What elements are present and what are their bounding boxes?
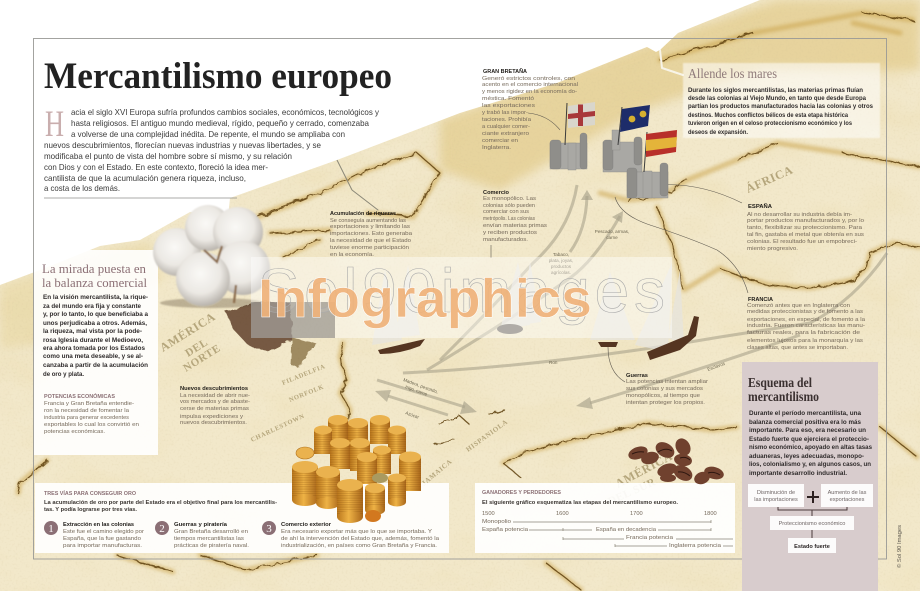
plus sign — [807, 491, 819, 503]
callout: guerras: Las potencias intentan ampliar — [626, 379, 708, 385]
potencias económicas: industria para generar excedentes — [44, 415, 129, 421]
callout: españa: colonias. El resultado fue un empobreci- — [747, 239, 857, 245]
panel body: Durante los siglos mercantilistas, las materias primas fluían — [688, 87, 863, 94]
intro text: cantilista de que la acumulación genera riqueza, incluso, — [44, 174, 246, 183]
callout: francia: exportaciones, en especial, de fomento a la — [747, 317, 866, 323]
callout: nuevos descubrimientos: La necesidad de abrir nue- — [180, 393, 250, 399]
intro text: a costa de los demás. — [44, 184, 120, 193]
trade goods labels: Madera, pescado, — [403, 377, 439, 395]
callout: acumulación de riquezas: Acumulación de riquezas — [330, 211, 396, 217]
panel body: era ahora tomada por los Estados — [43, 345, 145, 352]
intro text: modificaba el punto de vista del hombre sobre sí mismo, y su relación — [44, 152, 292, 161]
drop cap: H — [45, 104, 64, 145]
callout: nuevos descubrimientos: Nuevos descubrimientos — [180, 386, 248, 392]
map place names — [157, 163, 795, 508]
panel heading: GANADORES Y PERDEDORES — [482, 490, 561, 496]
fort: españa — [627, 130, 677, 198]
panel body: Estado fuerte que ejerciera el proteccio- — [749, 436, 869, 443]
callout: comercio: envían materias primas — [483, 223, 547, 229]
panel intro: tas. Y podía lograrse por tres vías. — [44, 507, 137, 513]
watermark: Sol90images — [258, 257, 665, 326]
callout: acumulación de riquezas: importaciones. Esto generaba — [330, 231, 413, 237]
callout: francia: clases altas, que antes se importaban. — [747, 345, 848, 351]
potencias económicas: ron la necesidad de fomentar la — [44, 408, 130, 414]
panel body: unos perjudicaba a otros. Además, — [43, 320, 147, 327]
trade goods labels: plata, joyas, — [549, 258, 573, 263]
callout: gran bretaña — [482, 68, 578, 151]
intro text: nuevos descubrimientos, florecían nuevas industrias y nuevas libertades, y se — [44, 141, 321, 150]
callout: gran bretaña: acento en el comercio internacional — [482, 82, 578, 88]
panel body: de oro y plata. — [43, 371, 84, 378]
callout: francia: industria. Fueron características las manu- — [747, 323, 865, 329]
ship — [497, 262, 541, 334]
panel body: como una meta deseable, y se al- — [43, 353, 143, 360]
way 3: 3 — [266, 523, 272, 535]
timeline chart: España en decadencia — [596, 527, 657, 533]
trade goods labels: carne — [606, 235, 618, 240]
potencias económicas: potencias económicas. — [44, 429, 105, 435]
intro text — [44, 104, 380, 193]
callout: acumulación de riquezas — [330, 211, 413, 258]
way 3: de ahí la intervención del Estado que, además, fomentó la — [281, 536, 440, 542]
callout: nuevos descubrimientos: impulsa expediciones y — [180, 414, 243, 420]
intro text: con Dios y con el Estado. En este contexto, floreció la idea mer- — [44, 163, 268, 172]
callout: francia: Comenzó antes que en Inglaterra con — [747, 303, 850, 309]
callout: guerras: intentan proteger los propios. — [626, 400, 705, 406]
way 2 — [155, 521, 249, 549]
trade goods labels: agrícolas. — [551, 270, 571, 275]
potencias económicas: exportables lo cual los convirtió en — [44, 422, 139, 428]
panel heading — [42, 261, 147, 290]
panel intro — [44, 500, 277, 513]
dark coastal patch — [226, 302, 318, 368]
panel body — [43, 294, 148, 378]
panel body: nismo económico, apoyado en altas tasas — [749, 444, 872, 451]
panel body: destinos. Muchos conflictos bélicos de esta etapa histórica — [688, 112, 848, 119]
callout: gran bretaña: y menos rigidez en la economía do- — [482, 89, 577, 95]
icon: cotton boll — [153, 205, 270, 308]
trade goods labels: Ron — [549, 360, 558, 365]
forts with flags — [550, 102, 677, 198]
map place names: JAMAICA — [420, 457, 454, 488]
callout: acumulación de riquezas: en la economía. — [330, 252, 374, 258]
map place names: NORFOLK — [288, 383, 325, 404]
box: estado fuerte: Estado fuerte — [794, 544, 830, 550]
way 3: Era necesario exportar más que lo que se importaba. Y — [281, 529, 432, 535]
timeline chart: 1600 — [556, 511, 569, 517]
callout: guerras: Guerras — [626, 373, 648, 379]
way 2: 2 — [159, 523, 165, 535]
callout: acumulación de riquezas: exportaciones y limitando las — [330, 224, 410, 230]
panel heading: Esquema del — [748, 375, 812, 390]
panel body: importante desarrollo industrial. — [749, 470, 847, 477]
box: aumento de las exportaciones — [821, 484, 873, 507]
trade goods labels: Pescado, armas, — [595, 229, 629, 234]
panel body: desde las colonias al Viejo Mundo, en tanto que desde Europa — [688, 95, 866, 102]
callout: gran bretaña: y trabó las impor- — [482, 110, 528, 116]
way 2: tiempos mercantilistas las — [174, 536, 244, 542]
callout: españa: portar productos manufacturados y, por lo — [747, 218, 864, 224]
potencias económicas: POTENCIAS ECONÓMICAS — [44, 392, 115, 400]
title: Mercantilismo europeo — [44, 56, 392, 97]
callout: acumulación de riquezas: Se conseguía aumentando las — [330, 218, 406, 224]
panel: la mirada puesta en la balanza comercial — [34, 250, 158, 455]
panel heading: Allende los mares — [688, 67, 777, 82]
timeline chart: 1800 — [704, 511, 717, 517]
way 2: Guerras y piratería — [174, 522, 228, 528]
intro text: a volverse de una complejidad inédita. De repente, el mundo se ampliaba con — [71, 130, 345, 139]
callout: españa: tal fin, gastaba el metal que obtenía en sus — [747, 232, 864, 238]
way 3: industrialización, en países como Gran Bretaña y Francia. — [281, 543, 437, 549]
way 1: 1 — [48, 523, 54, 535]
way 1 — [44, 521, 144, 549]
flag: spain — [646, 130, 677, 157]
callout: acumulación de riquezas: tuviese enorme participación — [330, 245, 409, 251]
flag: england — [568, 102, 595, 128]
callout: gran bretaña: méstica. Fomentó — [482, 96, 534, 102]
trade goods labels — [403, 229, 726, 420]
box: aumento de las exportaciones: exportaciones — [830, 497, 865, 503]
map place names: DEL SUR — [606, 476, 658, 508]
icon: gold coins — [292, 415, 421, 523]
callout: comercio: y reciben productos — [483, 230, 537, 236]
callout: españa: Al no desarrollar su industria debía im- — [747, 212, 852, 218]
map place names: FILADELFIA — [281, 363, 326, 387]
ship — [590, 272, 635, 347]
intro text: hasta religiosos. El antiguo mundo medieval, rígido, pequeño y cerrado, comenzaba — [71, 119, 369, 128]
timeline chart — [482, 511, 733, 549]
box: disminución de las importaciones — [748, 484, 804, 507]
map place names: CHARLESTOWN — [250, 413, 306, 444]
callout: nuevos descubrimientos: vos mercados y de abaste- — [180, 399, 250, 405]
callout: españa: tanto, flexibilizar su proteccionismo. Para — [747, 225, 863, 231]
way 3 — [262, 521, 440, 549]
potencias económicas — [44, 392, 139, 435]
panel body — [688, 87, 873, 136]
panel body: tuvieron origen en el celoso proteccionismo económico y los — [688, 120, 852, 127]
panel body: aduaneras, leyes adecuadas, monopo- — [749, 453, 864, 460]
fort: gran bretaña — [550, 102, 595, 170]
way 1: para importar manufacturas. — [63, 543, 142, 549]
callout: guerras: monopólicos, al tiempo que — [626, 393, 700, 399]
trade goods labels: Azúcar — [405, 410, 420, 420]
way 1: España, que la fue gastando — [63, 536, 141, 542]
callout: francia — [747, 297, 866, 351]
callout: nuevos descubrimientos: nuevos descubrimientos. — [180, 420, 247, 426]
panel heading: mercantilismo — [748, 389, 819, 404]
timeline chart: 1500 — [482, 511, 495, 517]
panel: ganadores y perdedores — [475, 483, 735, 553]
callout: comercio: metrópolis. Las colonias — [483, 216, 535, 222]
box: disminución de las importaciones: Disminución de — [757, 490, 795, 496]
trade goods labels: trigo, carne — [405, 384, 428, 397]
panel body: Durante el período mercantilista, una — [749, 410, 861, 417]
ships — [372, 262, 699, 360]
way 2: prácticas de piratería naval. — [174, 543, 249, 549]
callout: españa: miento progresivo. — [747, 246, 798, 252]
timeline chart: Francia potencia — [626, 535, 674, 541]
panel intro: La acumulación de oro por parte del Estado era el objetivo final para los mercantilis- — [44, 500, 277, 506]
panel body: deseos de expansión. — [688, 129, 748, 136]
way 1: Extracción en las colonias — [63, 522, 134, 528]
fort: francia — [603, 105, 650, 172]
potencias económicas: Francia y Gran Bretaña entendie- — [44, 401, 134, 407]
box: aumento de las exportaciones: Aumento de las — [828, 490, 867, 496]
icon: coffee beans — [627, 436, 725, 486]
flag: france — [620, 105, 650, 132]
callout: francia: FRANCIA — [748, 297, 774, 303]
callout: españa: ESPAÑA — [748, 203, 773, 210]
callout: gran bretaña: comerciar en — [482, 138, 518, 144]
callout: gran bretaña: taciones. Prohibía — [482, 117, 532, 123]
callout: guerras — [626, 373, 708, 406]
panel body — [749, 410, 872, 477]
callout: comercio: manufacturados. — [483, 237, 528, 243]
map place names: ÁFRICA — [744, 163, 795, 196]
trade arrows — [375, 185, 887, 420]
callout: comercio: colonias sólo pueden — [483, 203, 535, 209]
trade goods labels: productos — [551, 264, 572, 269]
callout: francia: elementos lujosos para la monarquía y las — [747, 338, 863, 344]
callout: gran bretaña: las exportaciones — [482, 103, 535, 109]
panel heading: La mirada puesta en — [42, 261, 146, 276]
panel body: partían los productos manufacturados hacia las colonias y otros — [688, 103, 873, 110]
callout: gran bretaña: Inglaterra. — [482, 145, 511, 151]
timeline chart: España potencia — [482, 527, 529, 533]
box: disminución de las importaciones: las importaciones — [754, 497, 798, 503]
timeline chart: 1700 — [630, 511, 643, 517]
callout: comercio: Es monopólico. Las — [483, 196, 536, 202]
callout: comercio: Comercio — [483, 190, 509, 196]
way 1: Este fue el camino elegido por — [63, 529, 144, 535]
way 3: Comercio exterior — [281, 522, 332, 528]
callout: gran bretaña: GRAN BRETAÑA — [483, 68, 528, 75]
intro text: acia el siglo XVI Europa sufría profundos cambios sociales, económicos, tecnológicos y — [71, 108, 380, 117]
callout: españa — [747, 203, 864, 252]
panel body: balanza comercial positiva era lo más — [749, 419, 861, 426]
trade goods labels: Esclavos — [707, 361, 726, 372]
panel intro: El siguiente gráfico esquematiza las etapas del mercantilismo europeo. — [482, 500, 678, 506]
panel body: rosa Iglesia durante el Medioevo, — [43, 337, 143, 344]
panel body: y, por lo tanto, lo que beneficiaba a — [43, 311, 148, 318]
box: proteccionismo económico: Proteccionismo económico — [779, 521, 845, 527]
callout: acumulación de riquezas: la necesidad de que el Estado — [330, 238, 411, 244]
callout: comercio: comerciar con sus — [483, 209, 529, 215]
timeline chart: Inglaterra potencia — [669, 543, 722, 549]
map place names: AMÉRICA — [157, 309, 218, 355]
ship — [372, 265, 425, 354]
callout: gran bretaña: Generó estrictos controles, con — [482, 76, 575, 82]
map place names: NORTE — [181, 342, 223, 375]
panel heading: la balanza comercial — [42, 275, 147, 290]
timeline chart: Monopolio — [482, 519, 511, 525]
leader lines — [491, 113, 748, 382]
callout: gran bretaña: ciante extranjero — [482, 131, 529, 137]
panel body: importante. Para eso, era necesario un — [749, 427, 866, 434]
flow diagram — [748, 484, 873, 553]
panel body: la riqueza, mal vista por la pode- — [43, 328, 142, 335]
callout: nuevos descubrimientos: cerse de materias primas — [180, 406, 249, 412]
panel: esquema del mercantilismo — [742, 362, 878, 591]
watermark: Infographics — [258, 267, 592, 329]
trade goods labels: Tabaco, — [553, 252, 569, 257]
panel heading: TRES VÍAS PARA CONSEGUIR ORO — [44, 489, 137, 497]
callout: nuevos descubrimientos — [180, 386, 250, 426]
callout: comercio — [483, 190, 547, 243]
panel heading — [748, 375, 819, 404]
ship — [635, 263, 699, 360]
callout: guerras: sus colonias y sus mercados — [626, 386, 703, 392]
callout: francia: medidas proteccionistas y de fomento a las — [747, 309, 863, 315]
panel body: lios, colonialismo y, en algunos casos, un — [749, 461, 871, 468]
map place names: AMÉRICA — [613, 449, 675, 491]
map place names: DEL — [183, 336, 210, 360]
callout: gran bretaña: a cualquier comer- — [482, 124, 530, 130]
callout: francia: facturas reales, para la fabricación de — [747, 330, 860, 336]
panel body: En la visión mercantilista, la rique- — [43, 294, 148, 301]
panel: allende los mares — [683, 63, 880, 138]
map place names: HISPANIOLA — [464, 418, 509, 454]
way 2: Gran Bretaña desarrolló en — [174, 529, 248, 535]
credit: © Sol 90 Images — [896, 524, 903, 568]
panel body: canzaba a partir de la acumulación — [43, 362, 148, 369]
panel: tres vías para conseguir oro — [35, 483, 449, 553]
panel body: za del mundo era fija y constante — [43, 303, 141, 310]
